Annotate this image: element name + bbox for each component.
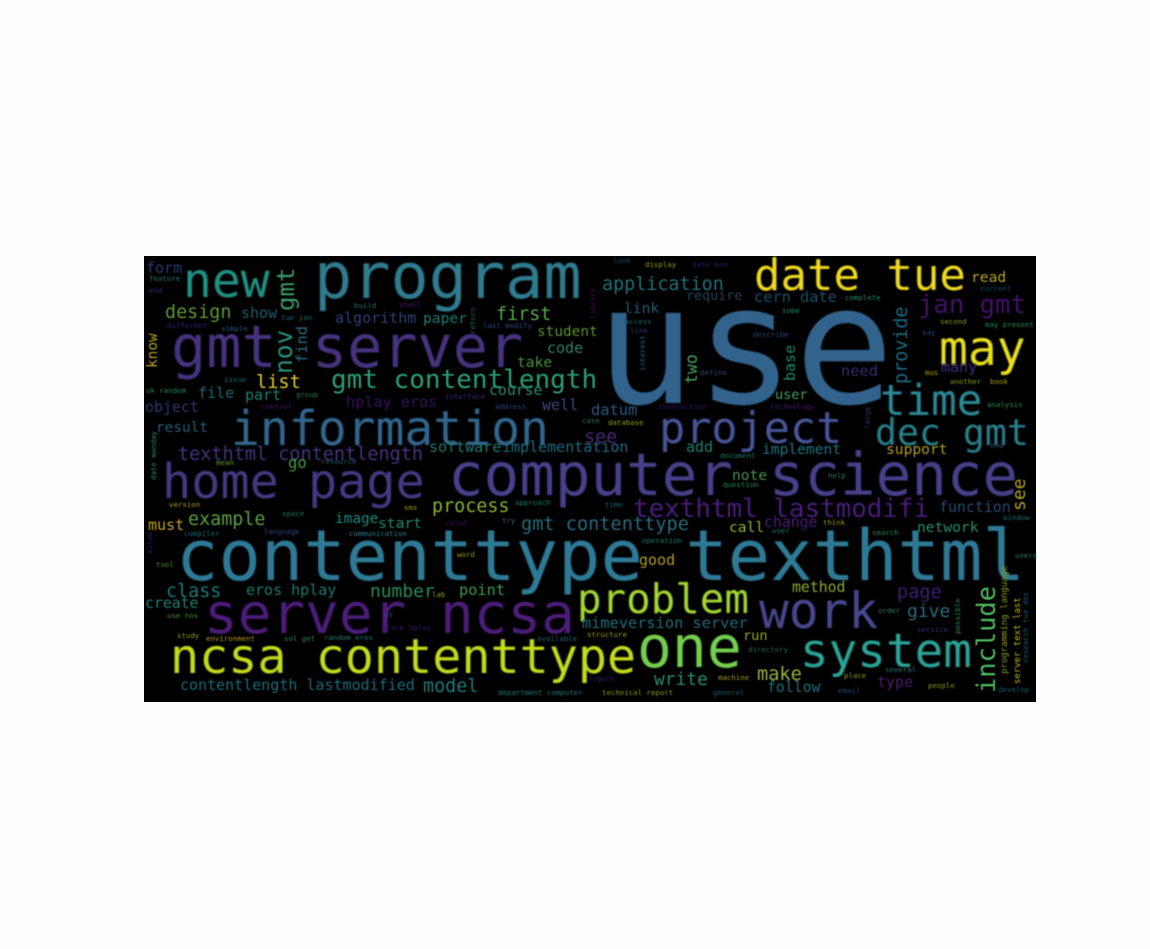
mid-sized words: first [496,304,551,325]
word: gmt contentlength: gmt contentlength [331,365,597,395]
word: gmt server: gmt server [171,313,523,381]
mid-sized words: eros hplay [246,581,336,599]
word: work: work [759,582,878,640]
mid-sized words: algorithm [335,309,416,327]
mid-sized words: part [245,386,281,404]
mid-sized words: application [602,274,724,295]
word: provide (vertical): provide [891,306,912,384]
tiny words: several [885,665,916,674]
mid-sized words: network [917,519,979,536]
word: dec gmt: dec gmt [875,411,1029,454]
tiny words: build [354,301,376,310]
word: computer science: computer science [448,440,1018,509]
tiny words: address [495,402,526,411]
tiny words: resource [321,457,357,466]
word: program: program [314,239,582,313]
tiny words: possible [953,598,962,634]
tiny words: shall [399,300,421,309]
tiny words: place [844,671,867,680]
mid-sized words: make [757,664,802,685]
mid-sized words: process [432,496,510,517]
tiny words: simple [221,324,248,333]
mid-sized words: support [886,441,948,458]
tiny words: define [700,368,727,377]
tiny words: communication [349,529,407,538]
tiny words: lab [432,590,446,599]
mid-sized words: image [335,511,378,527]
tiny words: access [625,317,652,326]
word: texthtml contentlength: texthtml contentlength [178,444,423,465]
tiny words: word [457,550,475,559]
mid-sized words: function [939,498,1011,516]
tiny words: control [261,402,292,411]
mid-sized words [145,259,1011,697]
tiny words: time [605,500,623,509]
mid-sized words: design [165,302,231,323]
tiny words: large [863,406,872,429]
mid-sized words: datum [591,401,637,419]
tiny words: end [990,441,1003,450]
mid-sized words: page [897,582,942,603]
tiny words: think [823,518,846,527]
mid-sized words: give [907,601,950,622]
tiny words: study [177,631,200,640]
mid-sized words: implementation [502,438,628,456]
mid-sized words: follow [767,679,821,696]
mid-sized words: hplay eros [346,393,437,411]
tiny words: document [720,451,756,460]
tiny words: say [922,328,936,337]
tiny words: mean [216,458,234,467]
mid-sized words: change [764,514,818,531]
word: texthtml lastmodifi: texthtml lastmodifi [633,494,929,524]
word: information: information [231,401,549,457]
tiny words: question [723,480,759,489]
tiny words: version [169,500,200,509]
tiny words: library [588,287,597,319]
word: time: time [880,377,982,426]
tiny words: feature [149,274,181,283]
mid-sized words: write [654,669,708,690]
mid-sized words: start [378,515,422,532]
tiny words: server text last [1013,597,1023,684]
word: may: may [939,321,1026,377]
tiny words: date monday [149,431,158,480]
mid-sized words: user [775,387,808,403]
mid-sized words: must [148,516,184,534]
mid-sized words: show [241,304,278,322]
tiny words: window [1003,513,1030,522]
mid-sized words: go [288,454,307,472]
tiny words: allow [145,531,154,554]
mid-sized words: number [370,581,435,602]
tiny words: try [502,516,516,525]
tiny words: machine [718,673,750,682]
mid-sized words: note [732,467,767,484]
word: project: project [659,404,842,454]
tiny words: department computer [498,688,583,697]
mid-sized words: link [624,300,659,317]
tiny words: random eros [324,633,373,642]
mid-sized words: require [686,289,742,304]
tiny words: black hplay [382,623,431,632]
tiny words: compiler [184,529,220,538]
tiny words: sms [404,503,417,512]
tiny words: interest [638,335,647,371]
mid-sized words: software [429,438,501,456]
mid-sized words: code [547,339,583,357]
tiny words: last modify [483,321,532,330]
mid-sized words: see [584,427,617,448]
mid-sized words: result [156,420,208,436]
tiny words: book [990,377,1008,386]
mid-sized words: course [489,382,543,399]
tiny words: some [782,306,800,315]
word: base (vertical): base [781,345,799,381]
tiny words: technology [770,402,815,411]
mid-sized words: well [542,396,578,414]
word: gmt (vertical): gmt [272,268,300,311]
word: include (vertical): include [971,586,1001,693]
tiny words: tue jan [281,313,312,322]
tiny words: available [537,634,578,643]
tiny words: general [713,688,744,697]
tiny words: users [1015,551,1037,560]
tiny words: help [828,471,846,480]
mid-sized words: take [517,354,552,371]
tiny words: describe [753,330,789,339]
large words [162,239,1029,685]
mid-sized words: call [729,519,764,536]
tiny words [145,256,1037,697]
tiny words: look [613,256,631,265]
word: one: one [637,613,742,681]
tiny words: may present [985,320,1034,329]
mid-sized words: type [877,673,913,691]
mid-sized words: good [639,551,675,569]
medium and small words [145,256,1037,697]
tiny words: search [872,528,899,537]
tiny words: use nos [167,611,198,620]
tiny words: programming language [1000,566,1010,674]
word: contenttype texthtml: contenttype texthtml [176,515,1025,597]
mid-sized words: gmt contenttype [521,514,689,535]
tiny words: develop [998,685,1029,694]
tiny words: figure [588,674,615,683]
mid-sized words: file [198,384,234,402]
tiny words: line [630,326,648,335]
tiny words: different [167,321,207,330]
tiny words: order [878,606,901,615]
word: date tue: date tue [754,250,966,301]
tiny words: service [917,625,949,634]
word: two (vertical): two [682,354,701,384]
mid-sized words: cern date [754,288,837,306]
mid-sized words: paper [423,310,467,327]
mid-sized words: point [459,581,505,599]
tiny words: issue [224,375,247,384]
tiny words: display [645,260,677,269]
tiny words: user [772,526,790,535]
word: home page: home page [162,454,425,510]
tiny words: uk random [146,386,187,395]
tiny words: analysis [987,400,1023,409]
mid-sized words: create [145,595,199,612]
tiny words: date mon [692,260,728,269]
word: see (vertical): see [1009,478,1030,511]
tiny words: current [980,284,1011,293]
word: know (vertical): know [145,333,161,368]
tiny words: end [149,286,162,295]
tiny words: group [296,390,318,399]
mid-sized words: method [792,579,845,596]
tiny words: return [468,307,477,334]
mid-sized words: model [423,676,478,697]
mid-sized words: list [256,372,301,393]
tiny words: case [582,416,600,425]
mid-sized words: object [145,398,199,416]
tiny words: environment [206,634,255,643]
tiny words: approach [515,498,551,507]
word: jan gmt: jan gmt [918,290,1026,320]
tiny words: people [928,681,955,690]
tiny words: database [608,418,644,427]
mid-sized words: add [686,438,713,456]
tiny words: technical report [602,688,673,697]
mid-sized words: many [941,358,977,376]
word: server ncsa: server ncsa [204,582,575,647]
tiny words: directory [748,645,789,654]
tiny words: second [940,317,967,326]
tiny words: complete [845,293,881,302]
mid-sized words: student [537,324,598,340]
word: nov (vertical): nov [269,330,298,374]
mid-sized words: example [188,509,266,530]
word: use: use [596,250,894,442]
tiny words: sol get [284,634,315,643]
tiny words: value [445,518,468,527]
mid-sized words: run [743,628,768,644]
mid-sized words: form [146,259,182,277]
word: problem: problem [577,575,749,623]
mid-sized words: implement [762,441,841,458]
word: new: new [183,253,270,309]
panel: word cloud background [144,256,1036,702]
tiny words: email [838,686,860,695]
word: find (vertical): find [293,326,311,363]
tiny words: research tue dec [1021,592,1030,663]
word: ncsa contenttype: ncsa contenttype [170,629,636,685]
tiny words: mus [925,368,938,377]
mid-sized words: read [971,269,1006,286]
mid-sized words: need [841,362,878,380]
mid-sized words: mimeversion server [582,614,748,632]
word: system: system [800,624,972,679]
mid-sized words: class [166,581,221,602]
tiny words: space [282,509,305,518]
tiny words: us [384,610,393,619]
tiny words: another [950,377,982,386]
tiny words: operation [642,536,682,545]
tiny words: instruction [658,402,707,411]
tiny words: interface [445,392,486,401]
word: contentlength lastmodified: contentlength lastmodified [180,676,415,694]
tiny words: language [264,527,300,536]
tiny words: tool [156,560,174,569]
tiny words: structure [587,630,628,639]
